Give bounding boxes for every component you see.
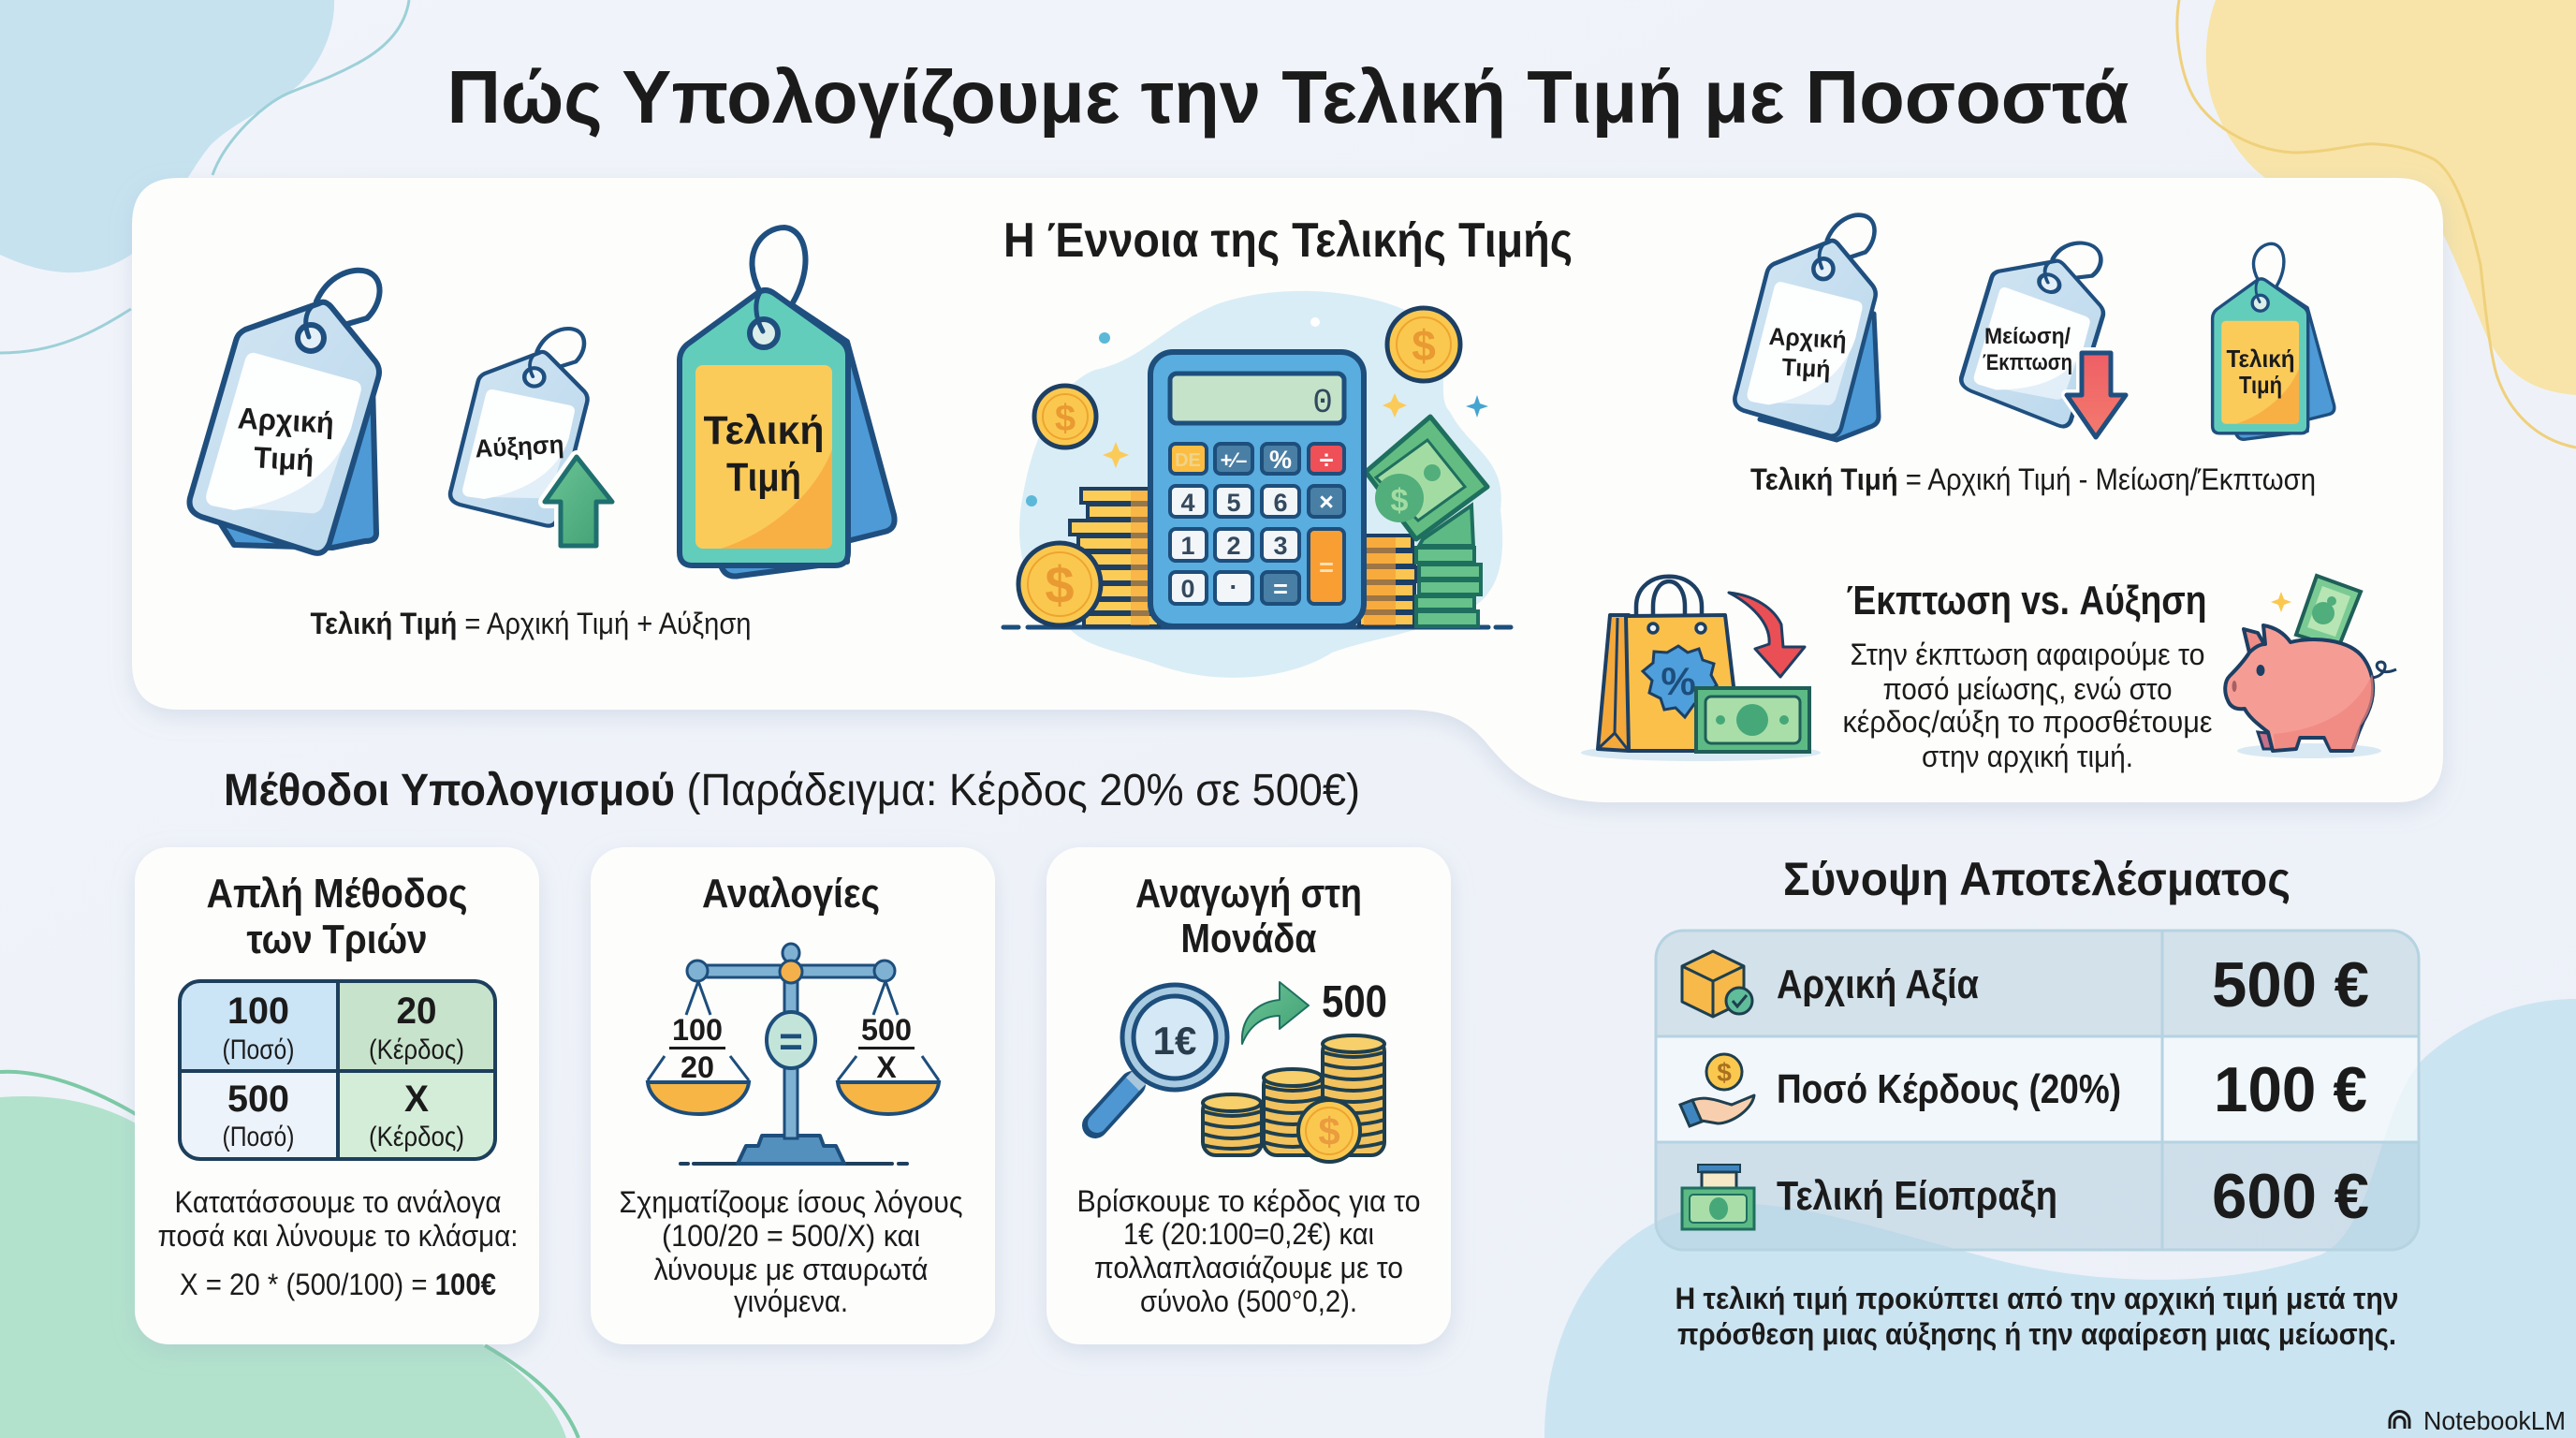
icon: calculator: = bbox=[1273, 575, 1288, 603]
tag: decrease with down arrow bbox=[1954, 227, 2126, 437]
text: discount explanation: Στην έκπτωση αφαιρούμε το bbox=[1850, 638, 2205, 671]
icon: green banknote stack bbox=[1366, 417, 1487, 626]
icon: coin top right bbox=[1387, 308, 1460, 381]
tag: initial price small: Αρχική bbox=[1768, 322, 1847, 354]
heading: unit method: Αναγωγή στη bbox=[1135, 871, 1362, 917]
tag: increase with up arrow bbox=[440, 328, 612, 546]
icon: right pan: 500 bbox=[861, 1013, 912, 1047]
icon: left pan: 20 bbox=[681, 1050, 714, 1084]
heading: calculation methods: Μέθοδοι Υπολογισμού (Παράδειγμα: Κέρδος 20% σε 500€) bbox=[224, 766, 1360, 815]
tag: decrease with down arrow: Μείωση/ bbox=[1984, 324, 2071, 349]
icon: up arrow bbox=[545, 457, 612, 546]
text: unit method explanation: 1€ (20:100=0,2€) και bbox=[1123, 1217, 1374, 1251]
panel: concept of final price bbox=[132, 178, 2443, 802]
heading: rule of three: των Τριών bbox=[247, 917, 427, 962]
text: rule of three explanation: Κατατάσσουμε το ανάλογα bbox=[174, 1185, 502, 1219]
row: final proceeds bbox=[1682, 1161, 2369, 1232]
row: profit amount: 100 € bbox=[2214, 1054, 2367, 1125]
table: proportion grid: X bbox=[404, 1078, 429, 1120]
icon: calculator: 1 bbox=[1180, 532, 1195, 560]
icon: coin large bottom bbox=[1018, 543, 1101, 625]
row: initial value: Αρχική Αξία bbox=[1777, 961, 1979, 1007]
icon: magnifier with 1 euro: 1€ bbox=[1153, 1019, 1196, 1063]
table: proportion grid: (Κέρδος) bbox=[369, 1122, 464, 1152]
icon: coin top right: $ bbox=[1412, 321, 1436, 370]
icon: calculator: 0 bbox=[1312, 384, 1333, 422]
row: initial value: 500 € bbox=[2212, 949, 2369, 1020]
label: 500: 500 bbox=[1322, 977, 1387, 1027]
icon: coin large bottom: $ bbox=[1045, 555, 1075, 614]
panel: unit method bbox=[1046, 847, 1451, 1344]
table: proportion grid: 500 bbox=[227, 1078, 289, 1120]
panel: rule of three bbox=[135, 847, 539, 1344]
row: initial value bbox=[1682, 949, 2369, 1020]
text: rule of three explanation: ποσά και λύνουμε το κλάσμα: bbox=[157, 1219, 519, 1253]
text: discount explanation bbox=[1842, 638, 2213, 773]
icon: calculator: = bbox=[1319, 553, 1334, 581]
icon: coin small left bbox=[1034, 386, 1096, 448]
heading: unit method bbox=[1135, 871, 1362, 961]
formula: addition: Τελική Τιμή = Αρχική Τιμή + Αύξηση bbox=[311, 607, 751, 640]
icon: dollar coin bbox=[1298, 1100, 1360, 1162]
illustration: calculator with coins bbox=[1003, 291, 1511, 678]
tag: initial price bbox=[189, 271, 380, 553]
heading: concept: Η Έννοια της Τελικής Τιμής bbox=[1003, 213, 1573, 268]
table: proportion grid: (Ποσό) bbox=[223, 1034, 294, 1065]
text: unit method explanation: Βρίσκουμε το κέρδος για το bbox=[1076, 1184, 1421, 1218]
text: unit method explanation: σύνολο (500°0,2). bbox=[1140, 1284, 1357, 1318]
tag: initial price small bbox=[1731, 214, 1880, 440]
text: discount explanation: στην αρχική τιμή. bbox=[1922, 740, 2133, 773]
icon: dollar coin: $ bbox=[1318, 1109, 1340, 1153]
logo: NotebookLM: NotebookLM bbox=[2423, 1406, 2566, 1435]
tag: initial price small: Τιμή bbox=[1781, 353, 1831, 383]
tag: final price small: Τελική bbox=[2226, 345, 2295, 373]
tag: final price: Τελική bbox=[704, 408, 824, 453]
icon: ground line bbox=[1003, 625, 1511, 629]
icon: calculator: ÷ bbox=[1320, 446, 1334, 474]
table: proportion grid: 100 bbox=[227, 990, 289, 1032]
table: proportion grid: (Κέρδος) bbox=[369, 1034, 464, 1065]
icon: right pan bbox=[838, 981, 939, 1114]
icon: calculator: DE bbox=[1175, 450, 1201, 471]
icon: hand with coin: $ bbox=[1717, 1058, 1732, 1087]
table: proportion grid: 20 bbox=[397, 990, 436, 1032]
heading: discount vs increase: Έκπτωση vs. Αύξηση bbox=[1846, 578, 2207, 624]
heading: proportions: Αναλογίες bbox=[702, 871, 880, 917]
text: proportions explanation: (100/20 = 500/X) και bbox=[662, 1219, 920, 1253]
icon: calculator: 2 bbox=[1226, 532, 1241, 560]
row: final proceeds: 600 € bbox=[2212, 1161, 2369, 1232]
row: profit amount: Ποσό Κέρδους (20%) bbox=[1777, 1066, 2121, 1112]
panel: proportions bbox=[591, 847, 995, 1344]
icon: calculator bbox=[1150, 352, 1364, 626]
tag: initial price: Τιμή bbox=[253, 440, 315, 477]
icon: calculator: % bbox=[1269, 446, 1292, 474]
icon: right coin stack bbox=[1359, 536, 1416, 626]
row: final proceeds: Τελική Είοπραξη bbox=[1777, 1173, 2057, 1219]
table: proportion grid: (Ποσό) bbox=[223, 1122, 294, 1152]
text: discount explanation: ποσό μείωσης, ενώ στο bbox=[1883, 672, 2172, 706]
text: proportions explanation: λύνουμε με σταυρωτά bbox=[653, 1253, 929, 1286]
text: proportions explanation: γινόμενα. bbox=[734, 1284, 848, 1318]
tag: final price small: Τιμή bbox=[2239, 371, 2282, 399]
icon: balance scale bbox=[648, 944, 939, 1164]
row: profit amount bbox=[1680, 1054, 2367, 1126]
icon: right pan: X bbox=[876, 1050, 897, 1084]
text: proportions explanation: Σχηματίζοομε ίσους λόγους bbox=[620, 1185, 962, 1219]
icon: piggy bank bbox=[2225, 576, 2396, 758]
tag: initial price: Αρχική bbox=[237, 401, 335, 440]
icon: calculator: 3 bbox=[1273, 532, 1288, 560]
icon: calculator: 0 bbox=[1180, 575, 1195, 603]
icon: down arrow bbox=[2067, 353, 2126, 437]
icon: cash register bbox=[1682, 1165, 1754, 1229]
icon: calculator: 6 bbox=[1273, 489, 1288, 517]
icon: calculator: 4 bbox=[1180, 489, 1195, 517]
icon: left pan: 100 bbox=[672, 1013, 723, 1047]
icon: green banknote stack: $ bbox=[1391, 483, 1409, 519]
icon: balance scale: = bbox=[779, 1019, 803, 1064]
table: result summary bbox=[1656, 931, 2419, 1250]
icon: coin stacks bbox=[1203, 1035, 1384, 1155]
table: proportion grid bbox=[180, 981, 495, 1159]
icon: magnifier with 1 euro bbox=[1095, 985, 1227, 1125]
icon: left pan bbox=[648, 981, 749, 1114]
icon: calculator: +⁄– bbox=[1221, 448, 1247, 472]
icon: shopping bag with discount: % bbox=[1661, 659, 1696, 703]
icon: calculator: · bbox=[1230, 573, 1237, 601]
heading: result summary: Σύνοψη Αποτελέσματος bbox=[1783, 853, 2291, 905]
text: unit method explanation: πολλαπλασιάζουμε με το bbox=[1094, 1251, 1403, 1284]
text: discount explanation: κέρδος/αύξη το προσθέτουμε bbox=[1842, 705, 2213, 739]
text: rule of three explanation: X = 20 * (500/100) = 100€ bbox=[180, 1268, 496, 1301]
heading: unit method: Μονάδα bbox=[1181, 916, 1316, 961]
icon: coin small left: $ bbox=[1055, 398, 1076, 439]
icon: curved green arrow bbox=[1242, 982, 1309, 1044]
icon: left coin stack bbox=[1070, 489, 1159, 626]
title: Πώς Υπολογίζουμε την Τελική Τιμή με Ποσοστά bbox=[447, 55, 2129, 139]
text: summary note bbox=[1676, 1282, 2398, 1351]
tag: decrease with down arrow: Έκπτωση bbox=[1983, 350, 2072, 375]
text: proportions explanation bbox=[620, 1185, 962, 1318]
icon: calculator: 5 bbox=[1226, 489, 1241, 517]
text: summary note: Η τελική τιμή προκύπτει από την αρχική τιμή μετά την bbox=[1676, 1282, 2398, 1315]
icon: shopping bag with discount bbox=[1581, 577, 1821, 761]
tag: final price small bbox=[2213, 243, 2334, 439]
text: summary note: πρόσθεση μιας αύξησης ή την αφαίρεση μιας μείωσης. bbox=[1677, 1317, 2396, 1351]
text: unit method explanation bbox=[1076, 1184, 1421, 1318]
heading: rule of three: Απλή Μέθοδος bbox=[206, 871, 468, 917]
formula: subtraction: Τελική Τιμή = Αρχική Τιμή - Μείωση/Έκπτωση bbox=[1750, 462, 2316, 496]
heading: rule of three bbox=[206, 871, 468, 962]
icon: hand with coin bbox=[1680, 1054, 1754, 1126]
icon: parcel box bbox=[1682, 951, 1752, 1017]
tag: increase with up arrow: Αύξηση bbox=[475, 431, 564, 462]
icon: calculator: × bbox=[1319, 488, 1334, 516]
tag: final price: Τιμή bbox=[726, 455, 801, 500]
tag: final price bbox=[680, 227, 895, 577]
text: rule of three explanation bbox=[157, 1185, 519, 1301]
